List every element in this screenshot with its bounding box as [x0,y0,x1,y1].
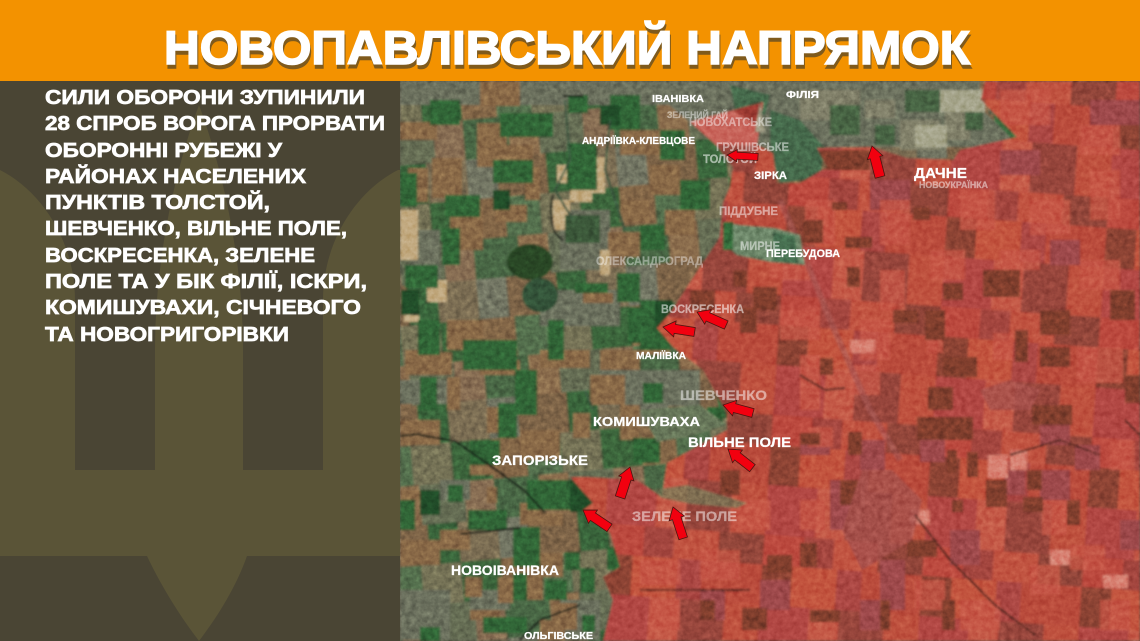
place labels [451,89,988,641]
rivers [400,80,583,640]
green strips over red zone [725,222,805,265]
satellite map [400,80,1140,641]
mauve fields [700,100,1140,630]
upper right fields [800,90,970,150]
dark green fields [401,105,673,515]
place labels: ВІЛЬНЕ ПОЛЕ [688,434,791,450]
place labels: ЗЕЛЕНИЙ ГАЙ [667,109,728,121]
place labels: НОВОІВАНІВКА [451,563,559,578]
place labels: ЗЕЛЕНЕ ПОЛЕ [632,508,737,524]
place labels: АНДРІЇВКА-КЛЕВЦОВЕ [582,134,695,147]
body text: ПУНКТІВ ТОЛСТОЙ, [45,190,270,214]
place labels: ОЛЕКСАНДРОГРАД [596,256,703,268]
settlement texture [842,380,1040,570]
place labels: МАЛІЇВКА [636,349,686,362]
place labels: НОВОУКРАЇНКА [919,180,988,191]
grain overlay [400,81,1140,641]
body text: ОБОРОННІ РУБЕЖІ У [45,140,283,162]
place labels: ПЕРЕБУДОВА [766,248,840,260]
place labels: ПІДДУБНЕ [719,206,778,218]
light patch Novokhatske [692,110,759,146]
place labels: ТОЛСТОЙ [703,153,757,166]
body text: ТА НОВОГРИГОРІВКИ [45,324,289,346]
place labels: ФІЛІЯ [786,89,819,101]
place labels: ІВАНІВКА [652,93,704,105]
body text: ВОСКРЕСЕНКА, ЗЕЛЕНЕ [45,245,315,267]
title: НОВОПАВЛІВСЬКИЙ НАПРЯМОК [164,21,970,74]
grey-green terrain [400,81,1020,640]
body text: ПОЛЕ ТА У БІК ФІЛІЇ, ІСКРИ, [45,270,367,293]
pale fields [400,157,610,322]
place labels: НОВОХАТСЬКЕ [689,117,772,129]
ravine lines [640,375,1140,635]
body text: СИЛИ ОБОРОНИ ЗУПИНИЛИ [45,87,365,109]
body text: КОМИШУВАХИ, СІЧНЕВОГО [45,297,361,319]
place labels: ЗІРКА [754,170,787,182]
brown fields [400,81,695,640]
place labels: ЗАПОРІЗЬКЕ [492,452,588,468]
river corridor terrain [730,85,825,183]
pale fields in red [850,340,1128,588]
place labels: ШЕВЧЕНКО [680,387,767,403]
title bar [0,0,1140,81]
place labels: ДАЧНЕ [914,165,967,182]
red attack arrows [579,144,888,541]
place labels: МИРНЕ [740,241,780,253]
body text: ШЕВЧЕНКО, ВІЛЬНЕ ПОЛЕ, [45,218,347,240]
place labels: ВОСКРЕСЕНКА [661,304,744,316]
body text: 28 СПРОБ ВОРОГА ПРОРВАТИ [45,113,385,135]
bright fields [640,90,1135,630]
body text [45,87,385,346]
place labels: ГРУШІВСЬКЕ [716,142,789,154]
forest [507,244,553,280]
green fields [400,95,723,641]
dark fields in red [690,150,1140,630]
occupied red zone [570,81,1140,641]
left panel background with trident emblem [0,81,400,641]
place labels: КОМИШУВАХА [593,414,701,429]
body text: РАЙОНАХ НАСЕЛЕНИХ [45,164,307,188]
